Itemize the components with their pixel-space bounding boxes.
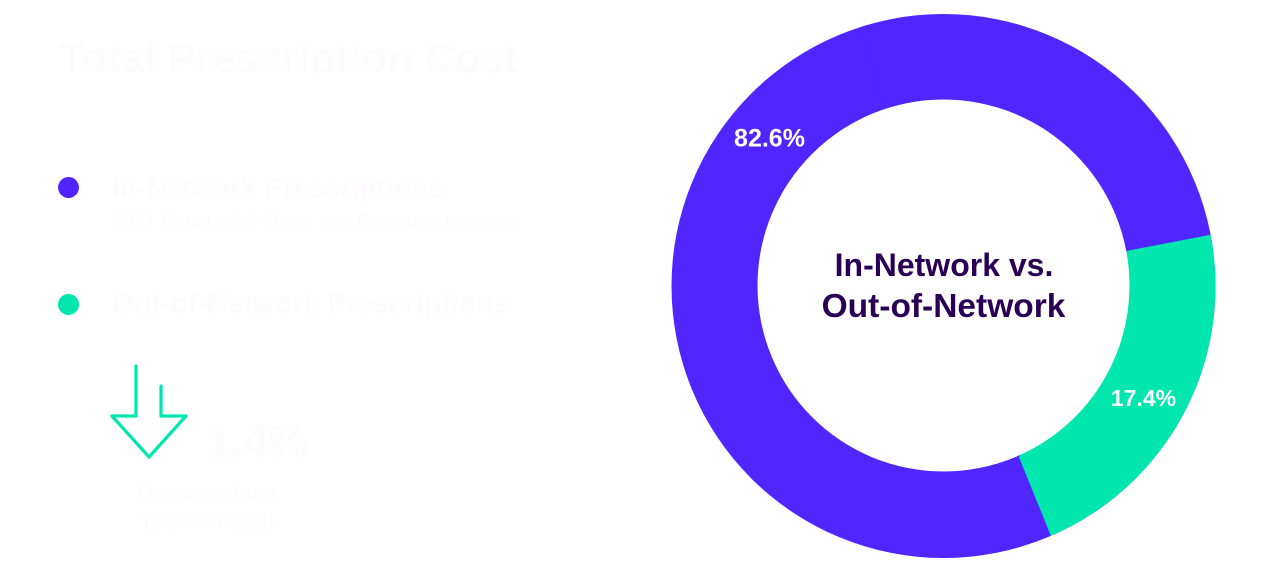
icon: down arrow — [112, 366, 186, 457]
legend label: out-of-network: Out-of-Network Prescriptions — [112, 288, 509, 320]
title: Total Prescription Cost — [59, 34, 518, 81]
stat caption: Decrease from — [138, 481, 276, 504]
donut hole — [758, 100, 1130, 472]
legend: out-of-network — [58, 288, 509, 320]
segment: out-of-network 17.4% — [1018, 234, 1216, 536]
legend: in-network — [58, 172, 516, 233]
legend label: in-network: In-Network Prescriptions — [112, 172, 443, 203]
stat caption — [132, 478, 282, 538]
donut center title: Out-of-Network — [822, 288, 1066, 325]
legend dot: out-of-network — [58, 294, 79, 315]
donut center title: In-Network vs. — [835, 247, 1053, 283]
donut chart — [672, 14, 1216, 558]
stat value: 1.4% — [206, 416, 309, 467]
donut center title — [822, 247, 1066, 325]
label: 82.6%: 82.6% — [734, 124, 805, 152]
legend dot: in-network — [58, 177, 79, 198]
label: 17.4%: 17.4% — [1111, 385, 1176, 411]
legend sublabel: in-network: 2021 Retail, Mail-Order and Extended Network — [112, 211, 516, 233]
stat caption: 18.8% in 2020 — [140, 511, 274, 534]
segment: in-network 82.6% — [672, 14, 1216, 558]
